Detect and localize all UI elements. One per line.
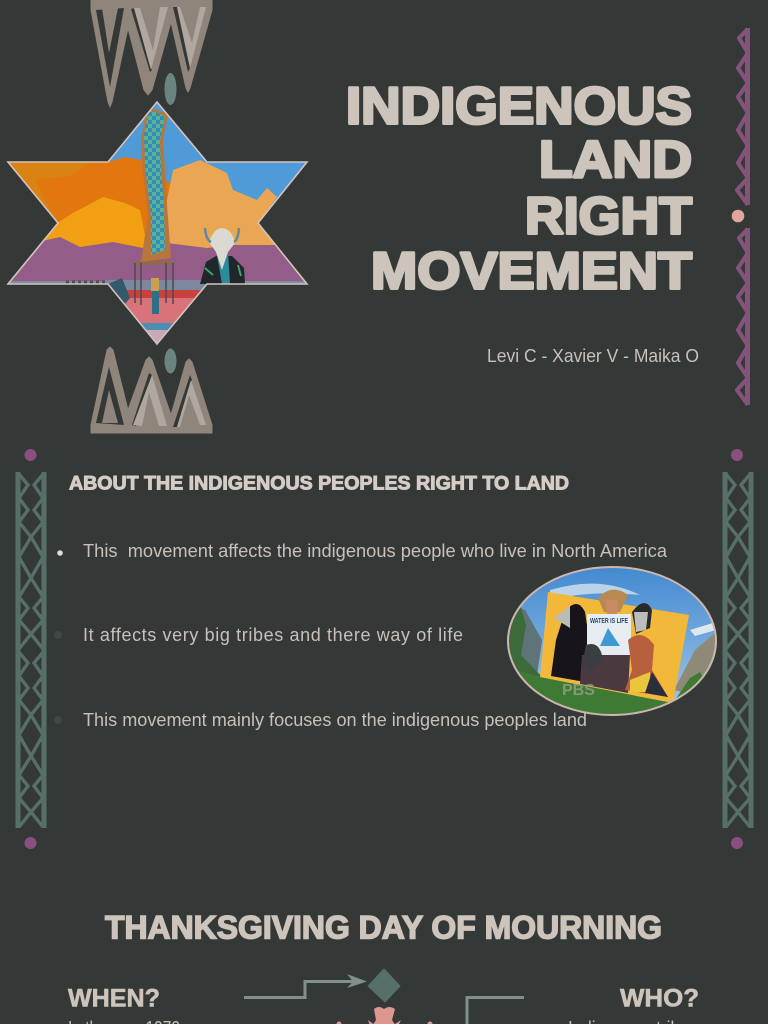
dots: purple markers (24, 449, 743, 849)
title: INDIGENOUS (346, 78, 692, 136)
photo: water is life oval: PBS (562, 682, 595, 699)
photo: water is life oval: WATER IS LIFE (590, 618, 628, 625)
ornament: top zigzag (91, 0, 212, 107)
connector: who (467, 998, 524, 1024)
heading: when: WHEN? (68, 984, 160, 1012)
title: MOVEMENT (371, 242, 692, 300)
icon: top teal drop (164, 73, 176, 105)
title (346, 78, 692, 300)
heading: about: ABOUT THE INDIGENOUS PEOPLES RIGHT TO LAND (69, 472, 569, 494)
arrow: when connector (244, 974, 367, 998)
ornament: right purple zigzag (737, 28, 748, 405)
ornament: right lattice (725, 472, 751, 828)
bullet list: It affects very big tribes and there way of life (83, 625, 463, 645)
title: LAND (539, 131, 692, 189)
heading: thanksgiving: THANKSGIVING DAY OF MOURNING (105, 910, 662, 946)
bullet list: This movement affects the indigenous people who live in North America (83, 541, 668, 561)
bullet list (54, 541, 668, 730)
heading: who: WHO? (620, 984, 699, 1012)
icon: pink dot (732, 210, 744, 222)
authors: Levi C - Xavier V - Maika O (487, 346, 699, 366)
bullet list: This movement mainly focuses on the indigenous peoples land (83, 710, 587, 730)
title: RIGHT (525, 188, 692, 246)
ornament: bottom zigzag (91, 347, 212, 433)
icon: bottom teal drop (164, 348, 176, 374)
ornament: left lattice (18, 472, 44, 828)
icon: pink flower (336, 1007, 432, 1024)
photo: water is life oval (507, 566, 717, 716)
icon: green diamond (368, 969, 400, 1002)
hexagram painting (0, 100, 320, 350)
